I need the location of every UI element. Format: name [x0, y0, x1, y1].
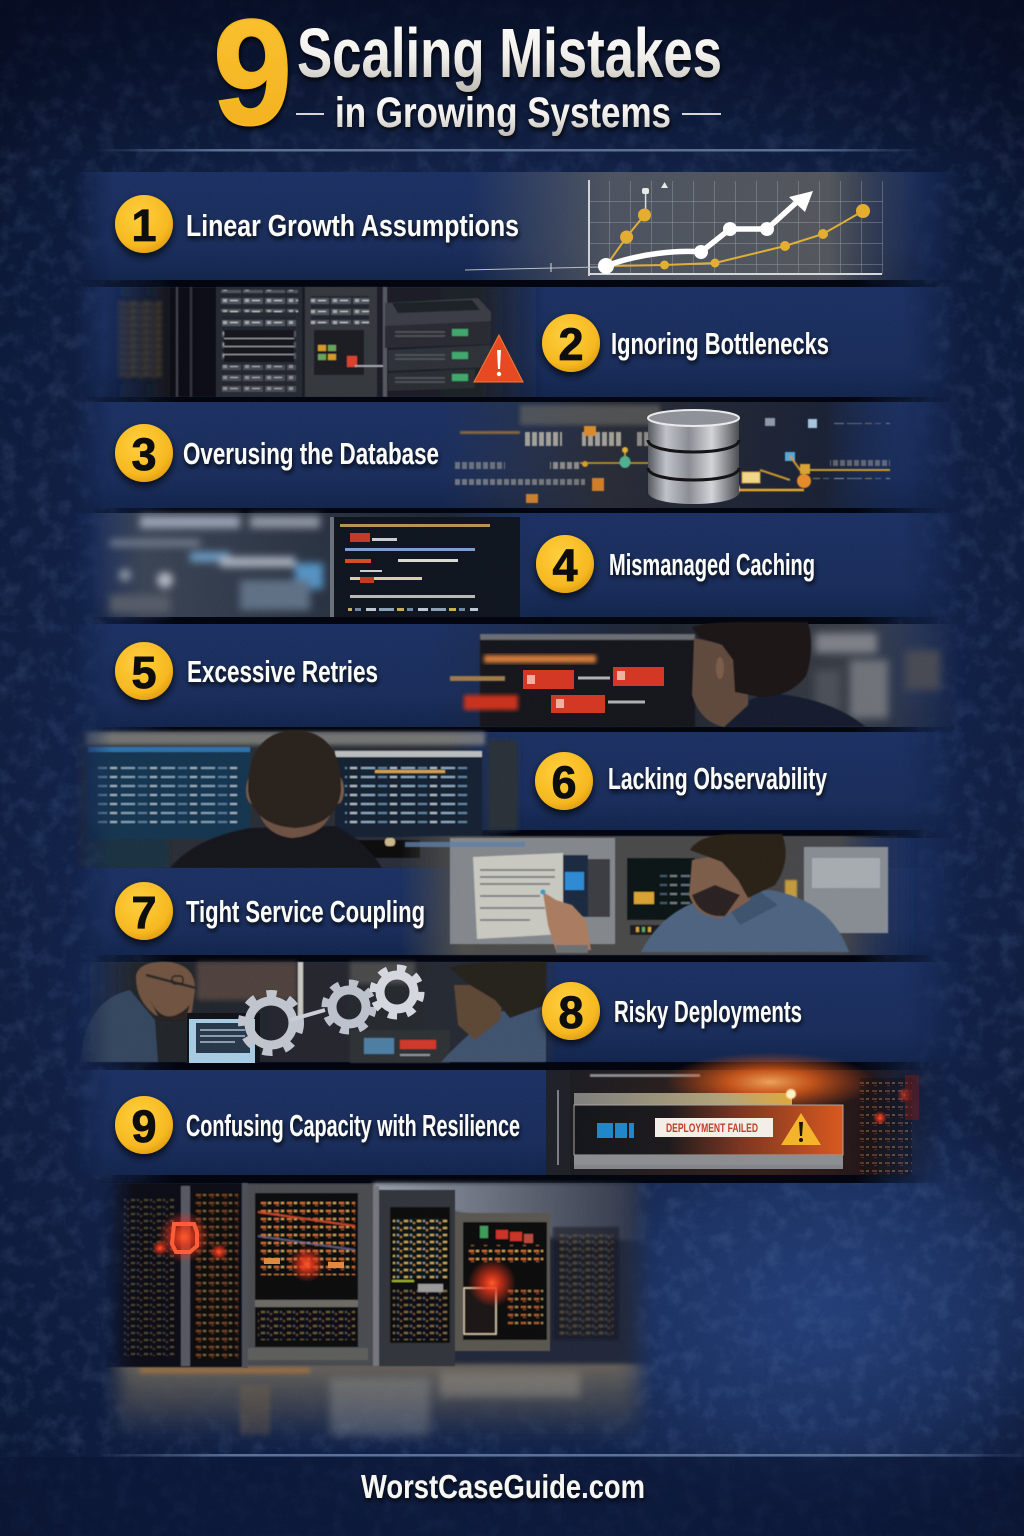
icon: warning triangle [781, 1113, 821, 1145]
engineer from behind [692, 622, 866, 727]
monitor with red error cards and engineer [430, 624, 960, 727]
badge 8: 8 [558, 987, 584, 1038]
label 2: Ignoring Bottlenecks [611, 326, 829, 361]
badge 6: 6 [551, 757, 577, 808]
badge 3 [115, 424, 173, 482]
label 1: Linear Growth Assumptions [186, 208, 519, 243]
engineer from behind [441, 962, 546, 1062]
subheading dash left [296, 113, 324, 115]
deployment failed message: DEPLOYMENT FAILED [666, 1121, 758, 1135]
icon: pointing hand [540, 890, 591, 953]
server racks [105, 1183, 619, 1368]
rack with red lights [860, 1075, 919, 1175]
blue status bars [597, 1123, 634, 1138]
badge 5 [115, 642, 173, 700]
label 6: Lacking Observability [608, 761, 828, 796]
data flow graphic [455, 405, 890, 503]
laptop [187, 1013, 260, 1063]
label 8: Risky Deployments [614, 994, 802, 1029]
panel: 2 Ignoring Bottlenecks [60, 287, 970, 402]
panel: 6 Lacking Observability [60, 730, 970, 868]
badge 9 [115, 1096, 173, 1154]
touch screen and engineer image [400, 836, 920, 955]
subheading: in Growing Systems: in Growing Systems [335, 89, 671, 137]
icon: warning triangle [474, 335, 523, 382]
badge 1: 1 [131, 200, 157, 251]
panel: 4 Mismanaged Caching [60, 513, 970, 624]
engineer from behind [170, 730, 382, 868]
footer website text: WorstCaseGuide.com [361, 1468, 645, 1505]
line chart [465, 180, 883, 276]
label 4: Mismanaged Caching [609, 547, 815, 582]
badge 7 [115, 882, 173, 940]
title [213, 0, 722, 156]
badge 3: 3 [131, 429, 157, 480]
heading: Scaling Mistakes: Scaling Mistakes [297, 14, 722, 92]
icon: database cylinder [648, 410, 739, 504]
panel: 9 Confusing Capacity with Resilience [60, 1052, 946, 1183]
label 5: Excessive Retries [187, 654, 378, 689]
badge 1 [115, 195, 173, 253]
badge 7: 7 [131, 887, 157, 938]
panel: 1 Linear Growth Assumptions [60, 172, 970, 287]
hero: server room image [105, 1180, 650, 1442]
server racks image [105, 287, 545, 397]
footer [0, 1457, 1024, 1536]
red alarm lights [152, 1211, 516, 1307]
blurred office and code monitor image [90, 513, 540, 617]
badge 8 [542, 982, 600, 1040]
label 9: Confusing Capacity with Resilience [186, 1108, 520, 1143]
deployment failed server panel [546, 1052, 946, 1175]
badge 2 [542, 314, 600, 372]
label 3: Overusing the Database [183, 436, 439, 471]
office scene [85, 962, 555, 1063]
badge 9: 9 [131, 1101, 157, 1152]
engineer in denim jacket [641, 834, 849, 952]
panel: 5 Excessive Retries [60, 622, 970, 732]
badge 6 [535, 752, 593, 810]
deployment failed message [655, 1118, 773, 1137]
ceiling and back wall [370, 1183, 680, 1240]
floor reflection [106, 1362, 650, 1442]
badge 4 [536, 535, 594, 593]
label 7: Tight Service Coupling [186, 894, 425, 929]
panel: 7 Tight Service Coupling [60, 834, 970, 962]
engineer with glasses [80, 962, 196, 1062]
server stack [385, 298, 491, 391]
subheading dash right [682, 113, 721, 115]
icon: gears [242, 968, 421, 1052]
monitors and engineer image [75, 732, 518, 868]
badge 5: 5 [131, 647, 157, 698]
badge 2: 2 [558, 319, 584, 370]
badge 4: 4 [552, 540, 578, 591]
panel: 8 Risky Deployments [60, 962, 970, 1070]
panel: 3 Overusing the Database [60, 402, 970, 513]
